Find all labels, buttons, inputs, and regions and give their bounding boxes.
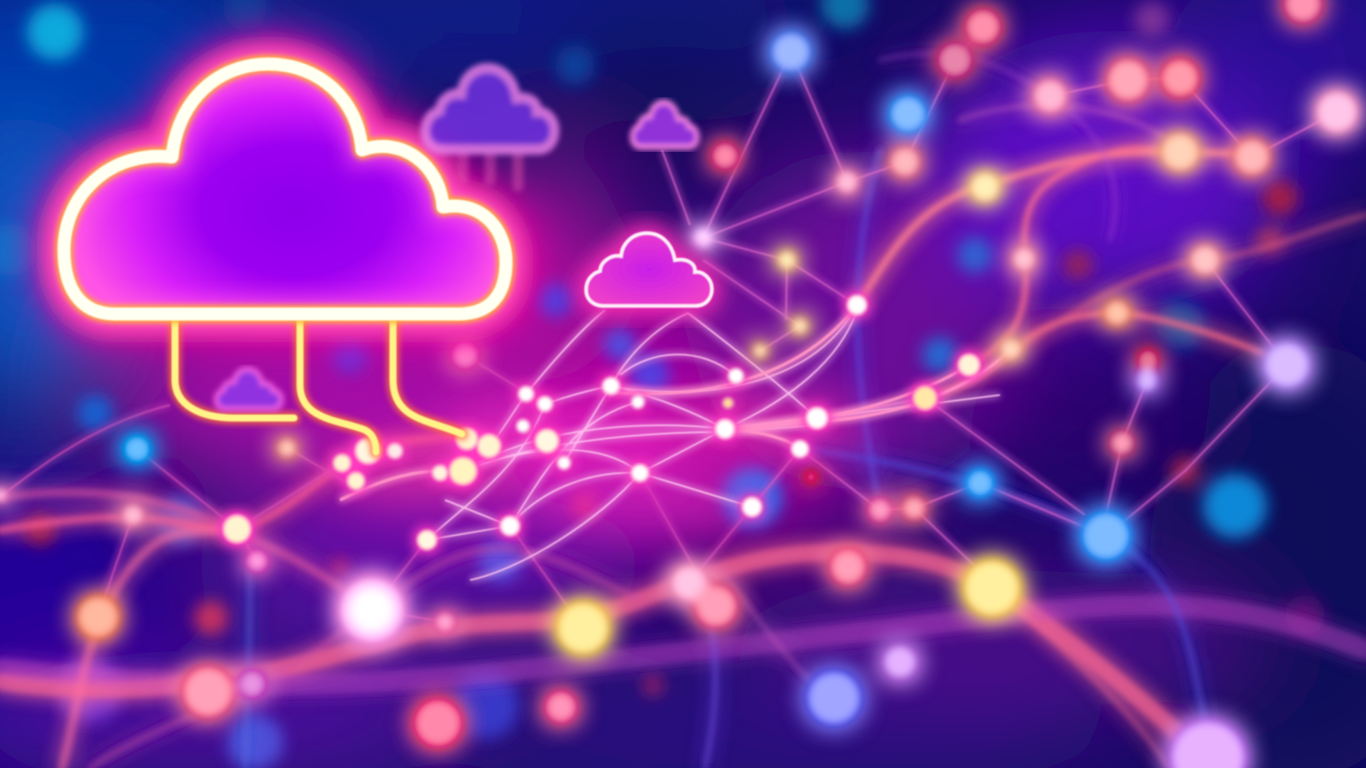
cloud neon outline: [64, 64, 506, 314]
icon: small pink blurred cloud: [632, 102, 698, 147]
cloud body: [64, 64, 506, 314]
bright fan of links to the right: [340, 305, 1011, 500]
fine white links from small cloud: [427, 305, 1000, 580]
central soft glow: [320, 390, 870, 530]
icon: purple blurred cloud with rain: [425, 68, 555, 186]
cloud tight outer glow: [64, 64, 506, 314]
network nodes: bright hot cores: [224, 296, 979, 549]
cloud inner pink rim: [64, 64, 506, 314]
big white node core: [349, 587, 395, 633]
thin network links: left: [0, 355, 752, 628]
icon: large neon cloud with three connectors: [64, 64, 506, 452]
icon: small white neon cloud: [586, 233, 712, 306]
cloud wide outer glow: [64, 64, 506, 314]
icon: faint purple cloud below large cloud: [216, 369, 282, 409]
thin network links: upper right: [662, 27, 1337, 590]
connector lines: [175, 320, 462, 452]
